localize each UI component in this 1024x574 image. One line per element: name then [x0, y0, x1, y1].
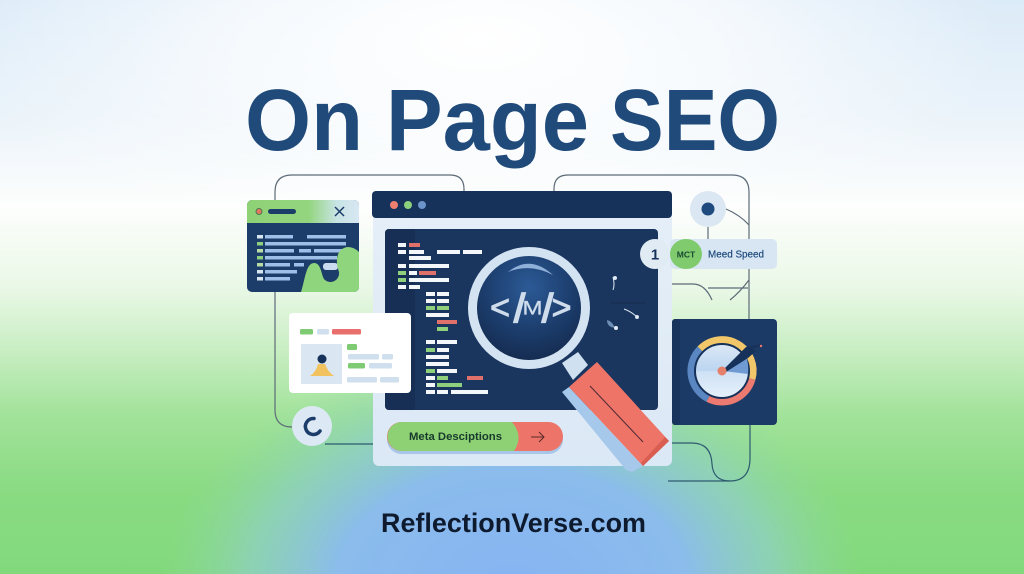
gauge ring	[691, 340, 753, 402]
header dot	[256, 208, 262, 214]
lens ring	[468, 247, 590, 369]
panel: browser window	[372, 191, 672, 466]
window dots	[390, 201, 426, 209]
gauge dial	[695, 344, 749, 398]
window title bar	[372, 191, 672, 218]
connector lines	[275, 175, 750, 481]
panel: speed gauge	[672, 319, 777, 425]
handle neck	[562, 352, 588, 380]
pill button	[387, 422, 563, 454]
lens text: M	[522, 298, 542, 320]
gauge needle	[724, 344, 761, 372]
image placeholder	[301, 344, 342, 384]
handle shadow	[562, 387, 643, 472]
code panel	[385, 229, 658, 410]
title	[245, 72, 780, 169]
label: speed pill	[640, 239, 777, 269]
text lines	[347, 344, 399, 382]
card header bar	[247, 200, 359, 223]
small panel glyphs	[607, 276, 645, 330]
panel: code card top left	[247, 200, 359, 292]
number: 1	[651, 246, 659, 264]
title: SEO	[610, 72, 780, 169]
green wave shape	[301, 247, 359, 292]
footer website text: ReflectionVerse.com	[381, 508, 646, 538]
lens text: /	[514, 287, 526, 331]
lens highlight	[508, 264, 553, 275]
code lines	[257, 235, 346, 280]
lens text: >	[552, 289, 571, 327]
left code strip	[385, 229, 415, 410]
pill text: Meed Speed	[708, 250, 764, 260]
pill arrow	[531, 432, 544, 442]
lens glass	[477, 256, 581, 360]
icon: magnifying glass	[468, 247, 669, 472]
handle	[569, 362, 669, 466]
title: Page	[386, 72, 589, 169]
panel: image card	[289, 313, 411, 393]
close icon	[335, 207, 344, 216]
number badge	[640, 239, 670, 269]
tag text: MCT	[677, 250, 696, 260]
lens text	[490, 287, 571, 331]
title: On	[245, 72, 363, 169]
gauge hub	[718, 366, 726, 376]
lens text: /	[542, 287, 554, 331]
tag row	[300, 329, 361, 334]
icon: top right dot badge	[690, 191, 726, 227]
icon: circular C badge	[292, 406, 332, 446]
header title pill	[268, 209, 296, 214]
code lines	[398, 243, 488, 394]
lens text: <	[490, 289, 510, 327]
green tag	[670, 239, 702, 269]
pill label: Meta Desciptions	[409, 431, 502, 443]
gauge wedge	[723, 355, 748, 374]
